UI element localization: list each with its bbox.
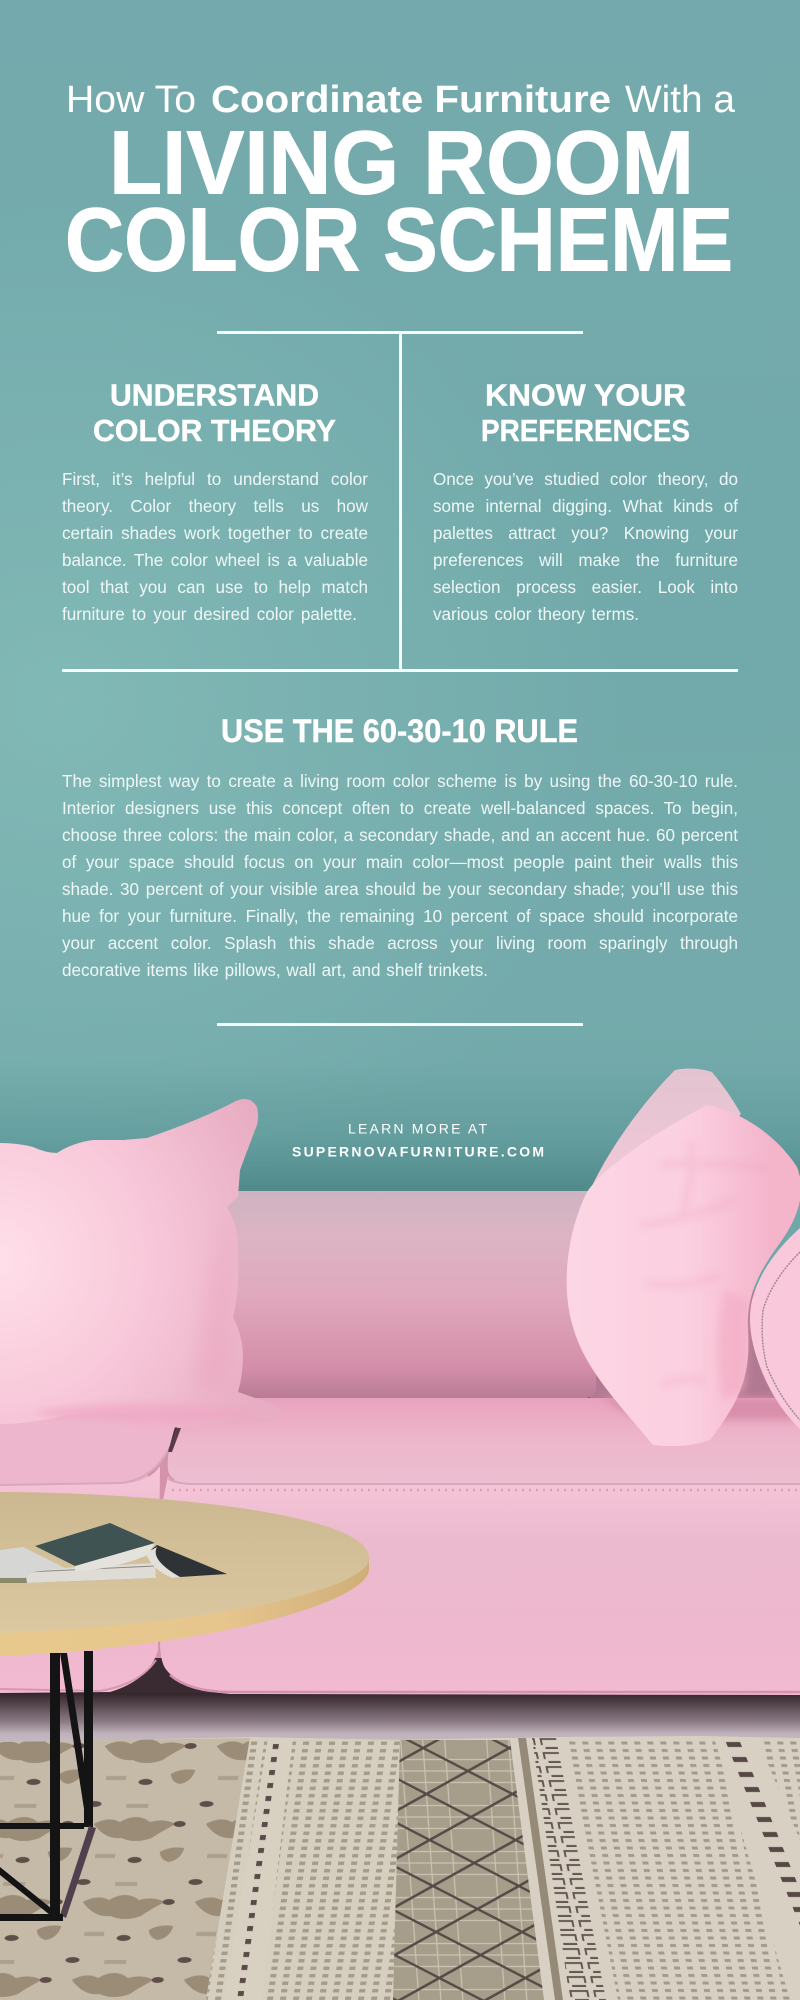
title: first line: Coordinate Furniture — [211, 79, 611, 121]
text: use the 60-30-10 rule: choose three colors: the main color, a secondary shade, and an accent hue. 60 percent — [62, 826, 738, 845]
title: first line: How To — [66, 79, 196, 121]
heading: understand color theory: COLOR THEORY — [93, 413, 336, 448]
call to action: LEARN MORE AT — [348, 1120, 490, 1136]
title: living room: LIVING ROOM — [109, 114, 694, 214]
text: know your preferences: some internal digging. What kinds of — [433, 497, 738, 516]
call to action: SUPERNOVAFURNITURE.COM — [292, 1144, 547, 1160]
book on table — [0, 1523, 227, 1583]
coffee table — [0, 1492, 369, 1656]
text: understand color theory: furniture to your desired color palette. — [62, 605, 357, 624]
sofa back bolster — [220, 1191, 596, 1398]
title — [65, 79, 736, 290]
heading: know your preferences: KNOW YOUR — [485, 378, 686, 412]
text: know your preferences: palettes attract you? Knowing your — [433, 524, 738, 543]
text: understand color theory: balance. The color wheel is a valuable — [62, 551, 368, 570]
text: know your preferences — [433, 470, 738, 624]
text: use the 60-30-10 rule: decorative items like pillows, wall art, and shelf trinkets. — [62, 961, 488, 980]
text: know your preferences: Once you’ve studied color theory, do — [433, 470, 738, 489]
text: understand color theory — [62, 470, 368, 624]
text: use the 60-30-10 rule: shade. 30 percent of your visible area should be your secondary shade; you’ll use this — [62, 880, 738, 899]
sofa main seat — [160, 1398, 800, 1695]
text: know your preferences: selection process easier. Look into — [433, 578, 738, 597]
text: understand color theory: tool that you can use to help match — [62, 578, 368, 597]
crease between cushions — [168, 1428, 181, 1452]
floor — [0, 1692, 800, 1752]
table legs — [0, 1651, 96, 1921]
title: color scheme: COLOR SCHEME — [65, 190, 733, 290]
text: understand color theory: theory. Color theory tells us how — [62, 497, 368, 516]
text: know your preferences: preferences will make the furniture — [433, 551, 738, 570]
text: use the 60-30-10 rule: your accent color. Splash this shade across your living room sparingly through — [62, 934, 738, 953]
text: understand color theory: certain shades work together to create — [62, 524, 368, 543]
text: understand color theory: First, it’s helpful to understand color — [62, 470, 368, 489]
heading: know your preferences — [481, 378, 690, 448]
text: know your preferences: various color theory terms. — [433, 605, 639, 624]
pillow: left — [0, 1099, 280, 1428]
text: use the 60-30-10 rule: hue for your furniture. Finally, the remaining 10 percent of space should incorporate — [62, 907, 738, 926]
text: use the 60-30-10 rule: The simplest way to create a living room color scheme is by using the 60-30-10 rule. — [62, 772, 738, 791]
title: first line: With a — [625, 79, 736, 121]
heading: use the 60-30-10 rule: USE THE 60-30-10 RULE — [221, 713, 578, 749]
rug — [0, 1736, 800, 2000]
text: use the 60-30-10 rule — [62, 772, 738, 980]
call to action — [292, 1120, 547, 1160]
pillow: right — [567, 1069, 800, 1446]
heading: know your preferences: PREFERENCES — [481, 413, 690, 448]
wall shadow above sofa — [0, 1060, 800, 1195]
sofa right bolster — [750, 1228, 800, 1429]
text: use the 60-30-10 rule: of your space should focus on your main color—most people paint their walls this — [62, 853, 738, 872]
text: use the 60-30-10 rule: Interior designers use this concept often to create well-balanced spaces. To begin, — [62, 799, 738, 818]
title: first line — [66, 79, 736, 121]
sofa base shadow — [0, 1290, 800, 1693]
divider lines — [62, 331, 738, 1026]
heading: understand color theory: UNDERSTAND — [110, 378, 319, 412]
heading: understand color theory — [93, 378, 336, 448]
sofa left cushion — [0, 1408, 176, 1693]
